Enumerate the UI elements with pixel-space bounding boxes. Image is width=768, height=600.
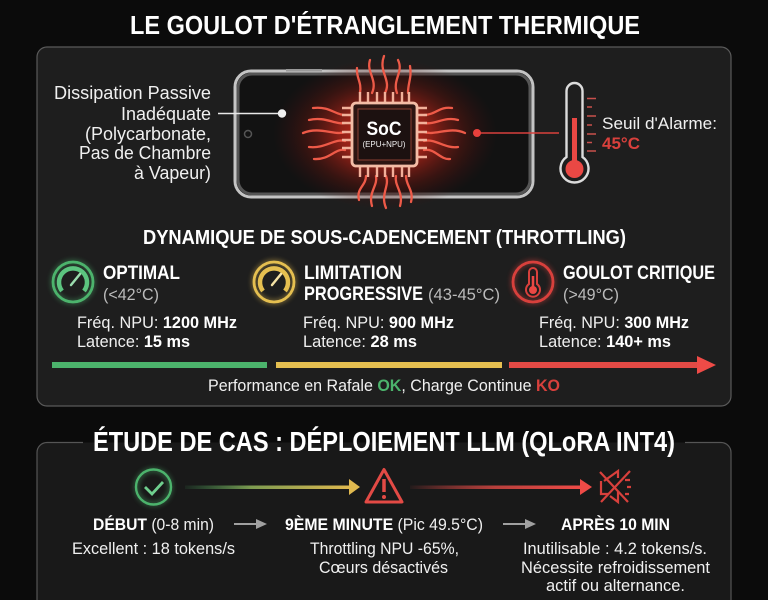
heading: throttling dynamics: DYNAMIQUE DE SOUS-CADENCEMENT (THROTTLING) — [143, 227, 626, 249]
step: start — [72, 515, 235, 558]
callout: alarm threshold — [602, 114, 717, 153]
panel: case study — [37, 426, 731, 600]
phone diagram — [235, 58, 533, 210]
callout: passive dissipation: Dissipation Passive — [54, 83, 211, 103]
state: progressive limitation: (43-45°C) — [428, 285, 500, 304]
state: critical bottleneck: (>49°C) — [563, 285, 619, 304]
callout: passive dissipation: (Polycarbonate, — [85, 124, 211, 144]
step: ninth minute: Cœurs désactivés — [319, 559, 448, 577]
step: ninth minute: Throttling NPU -65%, — [310, 540, 459, 558]
summary line: Performance en Rafale OK, Charge Continue KO — [208, 376, 560, 395]
callout: alarm threshold: Seuil d'Alarme: — [602, 114, 717, 133]
icon: disabled speed — [600, 471, 631, 502]
state: critical bottleneck: Latence: 140+ ms — [539, 332, 671, 351]
callout: passive dissipation: Pas de Chambre — [79, 143, 211, 163]
step: after ten minutes: APRÈS 10 MIN — [561, 515, 670, 534]
step: start: DÉBUT (0-8 min) — [93, 515, 214, 534]
icon: SoC chip: (EPU+NPU) — [362, 139, 406, 149]
arrow: ninth minute to after ten minutes — [410, 479, 592, 495]
state: critical bottleneck — [513, 262, 715, 351]
state: optimal: Latence: 15 ms — [77, 332, 190, 351]
icon: red thermometer — [513, 262, 553, 302]
state: optimal: OPTIMAL — [103, 263, 180, 284]
step: ninth minute — [285, 515, 483, 577]
state: progressive limitation — [254, 262, 500, 351]
state: optimal: (<42°C) — [103, 285, 159, 304]
icon: green gauge — [53, 262, 93, 302]
progress bar with arrow — [52, 356, 716, 374]
state: progressive limitation: Fréq. NPU: 900 MHz — [303, 313, 454, 332]
icon: yellow gauge — [254, 262, 294, 302]
callout: alarm threshold: 45°C — [602, 134, 640, 153]
state: progressive limitation: PROGRESSIVE — [304, 284, 423, 305]
callout: passive dissipation: Inadéquate — [121, 104, 211, 124]
icon: check circle — [136, 470, 171, 504]
panel: thermal bottleneck — [37, 47, 731, 406]
state: critical bottleneck: GOULOT CRITIQUE — [563, 263, 715, 284]
heading: case study: ÉTUDE DE CAS : DÉPLOIEMENT LLM (QLoRA INT4) — [93, 426, 675, 457]
arrow: grey step one — [234, 519, 267, 529]
title: LE GOULOT D'ÉTRANGLEMENT THERMIQUE — [130, 10, 640, 40]
icon: SoC chip: SoC — [366, 119, 402, 140]
state: optimal — [53, 262, 237, 351]
icon: heat waves — [303, 56, 465, 208]
state: progressive limitation: Latence: 28 ms — [303, 332, 417, 351]
icon: SoC chip — [342, 92, 427, 177]
state: progressive limitation: LIMITATION — [304, 263, 402, 284]
step: after ten minutes: Inutilisable : 4.2 tokens/s. — [523, 540, 707, 558]
icon: warning triangle — [366, 470, 402, 502]
arrow: start to ninth minute — [185, 479, 360, 495]
step: after ten minutes — [521, 515, 710, 595]
connector: chip to thermometer — [473, 129, 559, 137]
arrow: grey step two — [503, 519, 536, 529]
step: after ten minutes: actif ou alternance. — [546, 577, 685, 595]
icon: thermometer — [560, 83, 596, 182]
step: ninth minute: 9ÈME MINUTE (Pic 49.5°C) — [285, 515, 483, 534]
step: after ten minutes: Nécessite refroidissement — [521, 559, 710, 577]
state: critical bottleneck: Fréq. NPU: 300 MHz — [539, 313, 689, 332]
callout: passive dissipation — [54, 83, 286, 183]
step: start: Excellent : 18 tokens/s — [72, 540, 235, 558]
callout: passive dissipation: à Vapeur) — [134, 163, 211, 183]
state: optimal: Fréq. NPU: 1200 MHz — [77, 313, 237, 332]
